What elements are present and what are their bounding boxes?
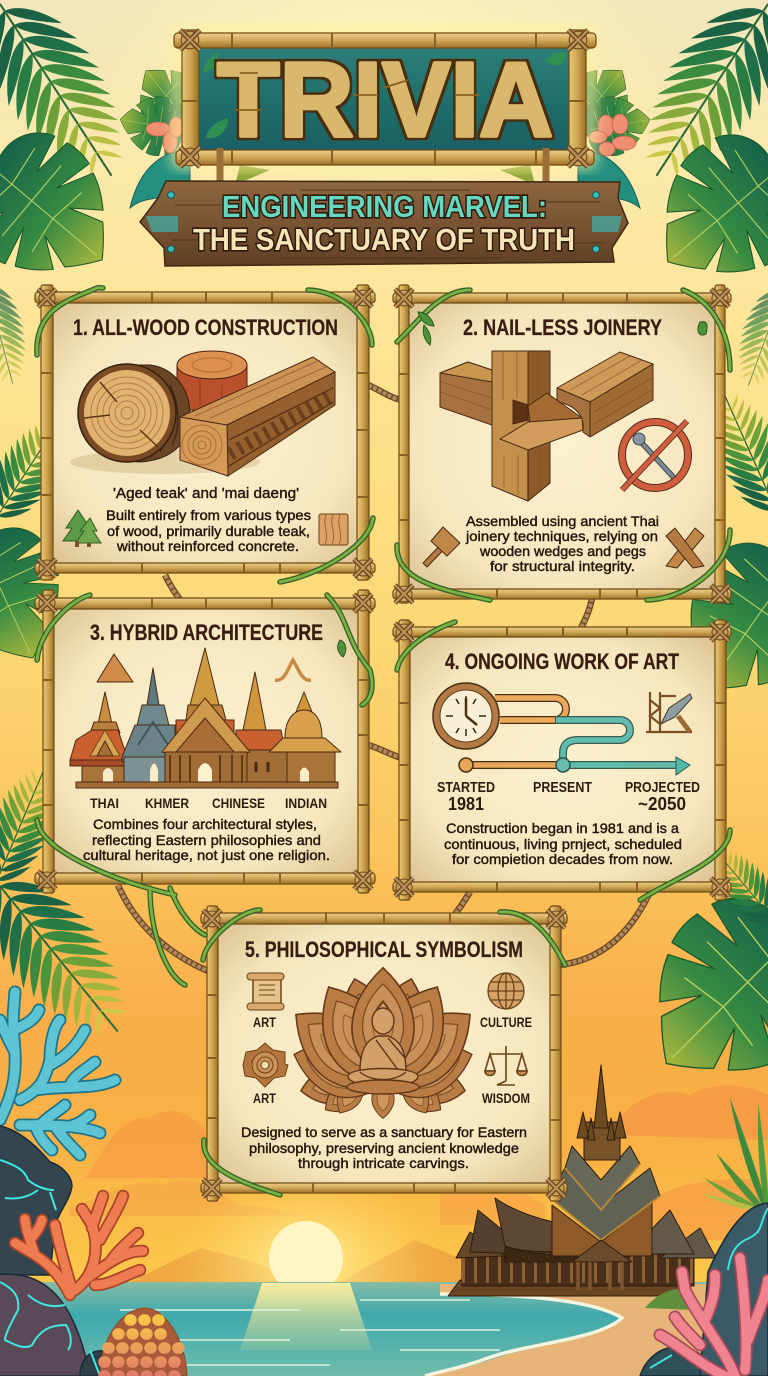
style labels: THAI bbox=[90, 796, 119, 811]
icon: crossed joint bbox=[666, 528, 704, 568]
palm frond left lower bbox=[0, 848, 158, 1064]
label art: ART bbox=[253, 1015, 277, 1030]
glowing right rock vein bbox=[650, 1208, 768, 1368]
central bbox=[162, 648, 250, 786]
icon: curved roof arch bbox=[275, 660, 311, 680]
carved lotus with buddha bbox=[277, 968, 489, 1121]
panel 5 frame bbox=[201, 906, 567, 1201]
temple composite bbox=[70, 648, 341, 788]
plank teal weathering bbox=[146, 216, 622, 232]
orange coral bbox=[15, 1196, 143, 1295]
monstera leaf right bbox=[624, 116, 768, 314]
body text 4: for compietion decades from now. bbox=[452, 851, 673, 867]
heading 4: 4. ONGOING WORK OF ART bbox=[445, 649, 679, 674]
palm frond right middle bbox=[692, 380, 768, 529]
label art 2: ART bbox=[253, 1091, 277, 1106]
rocks right bbox=[640, 1203, 768, 1376]
palm frond left lower up bbox=[0, 755, 75, 898]
monstera leaf right lower bbox=[606, 874, 768, 1124]
small leaves in board bbox=[203, 52, 566, 138]
body text 3 bbox=[83, 816, 330, 863]
panel 4: ongoing work of art bbox=[393, 620, 731, 900]
panel 3: hybrid architecture bbox=[35, 590, 375, 893]
glowing rock veins bbox=[0, 1160, 100, 1376]
red log bbox=[177, 365, 247, 410]
palm frond top right bbox=[611, 0, 768, 205]
subtitle line 1: ENGINEERING MARVEL: bbox=[222, 189, 547, 224]
body text 1: Built entirely from various types bbox=[106, 507, 311, 523]
heading 2: 2. NAIL-LESS JOINERY bbox=[463, 315, 662, 340]
body text 1: without reinforced concrete. bbox=[116, 538, 299, 554]
teal board bbox=[196, 46, 572, 152]
panel 2: nail-less joinery bbox=[393, 285, 731, 603]
bamboo frame bbox=[174, 30, 596, 192]
body text 1: of wood, primarily durable teak, bbox=[107, 523, 310, 539]
timeline labels: PROJECTED bbox=[625, 779, 700, 796]
style labels: CHINESE bbox=[212, 796, 265, 811]
palm leaves bottom right bbox=[701, 1096, 768, 1219]
body text 3: cultural heritage, not just one religion. bbox=[83, 847, 330, 863]
faded frond left bbox=[0, 273, 40, 391]
heading 5: 5. PHILOSOPHICAL SYMBOLISM bbox=[245, 937, 523, 962]
palm frond top left bbox=[0, 0, 157, 205]
icon: globe bbox=[488, 973, 524, 1009]
timeline labels: ~2050 bbox=[638, 794, 686, 814]
plank studs bbox=[168, 192, 599, 252]
beam bbox=[180, 357, 335, 425]
panel 2 frame bbox=[393, 285, 731, 603]
icon: roof gable bbox=[97, 654, 133, 682]
teal coral bbox=[0, 992, 115, 1155]
body text 4: continuous, living prnject, scheduled bbox=[444, 836, 682, 852]
body text 5 bbox=[241, 1124, 527, 1171]
title foliage bbox=[115, 49, 655, 208]
bamboo joints on letters bbox=[234, 73, 480, 110]
icon: scaffold and chisel bbox=[646, 692, 692, 732]
body text 3: reflecting Eastern philosophies and bbox=[92, 832, 321, 848]
vine leaves bbox=[338, 312, 707, 657]
panel 4 frame bbox=[393, 620, 731, 900]
icon: mallet bbox=[423, 527, 460, 567]
body text 2: for structural integrity. bbox=[490, 558, 635, 574]
title sign bbox=[115, 30, 655, 208]
connecting ropes bbox=[118, 385, 650, 971]
icon: crossed out nail bbox=[622, 421, 688, 490]
label culture: CULTURE bbox=[480, 1015, 532, 1030]
small shrub on sand bbox=[645, 1289, 695, 1310]
khmer bbox=[122, 668, 175, 787]
indian bbox=[269, 692, 341, 785]
buddha figure bbox=[347, 1002, 419, 1094]
joinery illustration bbox=[440, 351, 653, 501]
monstera leaf left middle bbox=[0, 514, 88, 684]
monstera leaf left bbox=[0, 114, 146, 312]
timeline labels: PRESENT bbox=[533, 779, 592, 796]
monstera leaf right middle bbox=[649, 525, 768, 729]
icon: clock bbox=[433, 683, 499, 749]
subtitle plank bbox=[140, 181, 628, 266]
body text 3: Combines four architectural styles, bbox=[93, 816, 317, 832]
frame glow bbox=[178, 32, 590, 162]
timeline labels bbox=[437, 779, 700, 814]
body text 2: joinery techniques, relying on bbox=[465, 528, 658, 544]
icon: scales bbox=[485, 1046, 527, 1085]
sun bbox=[171, 1167, 441, 1357]
timeline illustration bbox=[459, 698, 690, 775]
round log bbox=[127, 365, 190, 462]
body text 2: Assembled using ancient Thai bbox=[466, 513, 659, 529]
body text 5: through intricate carvings. bbox=[298, 1155, 469, 1171]
body text 2 bbox=[465, 513, 659, 574]
style labels bbox=[90, 796, 327, 811]
distant hills bbox=[130, 1240, 480, 1282]
icon: wood grain swatch bbox=[319, 514, 348, 545]
shoreline foam bbox=[425, 1294, 622, 1376]
pink coral bbox=[660, 1258, 768, 1376]
sunset clouds bbox=[70, 1086, 768, 1240]
icon: mandala flower bbox=[243, 1043, 288, 1087]
palm frond right lower bbox=[696, 834, 768, 941]
style labels: INDIAN bbox=[285, 796, 327, 811]
panel 1: all-wood construction bbox=[35, 285, 375, 580]
panel 1 frame bbox=[35, 285, 375, 580]
body text 1 bbox=[106, 507, 311, 554]
title text: TRIVIA bbox=[217, 41, 553, 159]
icon: scroll bbox=[247, 973, 284, 1010]
wood illustration bbox=[70, 351, 335, 476]
plank grain bbox=[172, 190, 606, 258]
body text 4: Construction began in 1981 and is a bbox=[446, 820, 679, 836]
right wing bbox=[236, 672, 290, 786]
timeline labels: 1981 bbox=[448, 794, 484, 814]
sanctuary temple bbox=[448, 1065, 716, 1296]
body text 4 bbox=[444, 820, 682, 867]
sandy beach bbox=[430, 1284, 768, 1376]
yellow brain coral bbox=[100, 1308, 187, 1376]
body text 2: wooden wedges and pegs bbox=[479, 543, 646, 559]
faded frond right bbox=[722, 275, 768, 395]
heading 3: 3. HYBRID ARCHITECTURE bbox=[90, 620, 323, 645]
heading 1: 1. ALL-WOOD CONSTRUCTION bbox=[73, 315, 338, 340]
top sun glow bbox=[84, 0, 684, 230]
panel 5: philosophical symbolism bbox=[201, 906, 567, 1201]
thai bbox=[70, 692, 128, 786]
rocks left bbox=[0, 1125, 130, 1376]
label wisdom: WISDOM bbox=[482, 1091, 530, 1106]
panel 3 frame bbox=[35, 590, 375, 893]
body text 5: philosophy, preserving ancient knowledge bbox=[249, 1140, 519, 1156]
subtitle line 2: THE SANCTUARY OF TRUTH bbox=[193, 222, 575, 257]
body text 5: Designed to serve as a sanctuary for Eastern bbox=[241, 1124, 527, 1140]
sea bbox=[0, 1282, 768, 1376]
palm frond left middle bbox=[0, 401, 88, 537]
icon: pine trees bbox=[63, 510, 101, 547]
style labels: KHMER bbox=[145, 796, 189, 811]
jungle vines bbox=[37, 288, 730, 1195]
timeline labels: STARTED bbox=[437, 779, 495, 796]
caption 1: 'Aged teak' and 'mai daeng' bbox=[113, 485, 299, 502]
